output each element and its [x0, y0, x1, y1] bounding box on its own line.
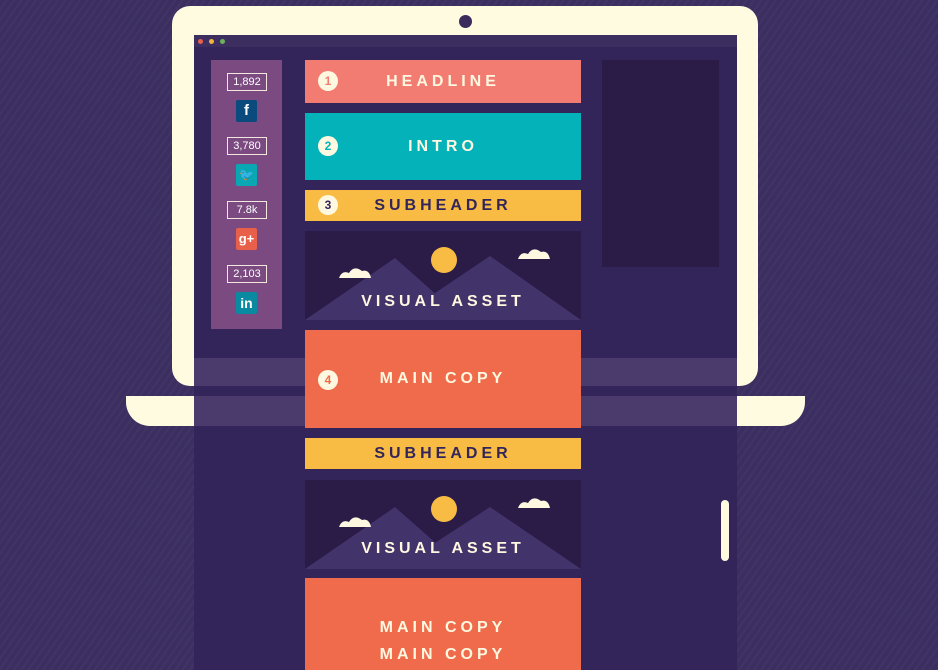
screen page — [194, 35, 737, 670]
subheader 2 — [305, 438, 581, 469]
browser bar — [194, 35, 737, 47]
headline — [305, 60, 581, 103]
overlay bands — [194, 358, 737, 386]
scrollbar — [721, 500, 729, 561]
visual asset 1: VISUAL ASSET — [361, 292, 525, 310]
main copy 1: 4 — [325, 373, 331, 387]
subheader 1: 3 — [325, 198, 331, 212]
main copy 1 — [305, 330, 581, 428]
sidebar: social shares: 🐦 — [239, 168, 254, 182]
sidebar: social shares: in — [240, 295, 253, 311]
sidebar: social shares: 7.8k — [237, 204, 257, 216]
intro: INTRO — [408, 138, 478, 154]
headline: 1 — [325, 74, 331, 88]
sidebar: social shares: g+ — [239, 231, 254, 246]
sidebar: social shares: 2,103 — [233, 268, 261, 280]
main copy 2 — [305, 578, 581, 670]
headline: HEADLINE — [386, 72, 500, 90]
visual asset 2 — [305, 480, 581, 569]
visual asset 1 — [305, 231, 581, 320]
sidebar: social shares: 1,892 — [233, 76, 261, 88]
sidebar: social shares: 3,780 — [233, 140, 261, 152]
subheader 2: SUBHEADER — [374, 444, 512, 462]
intro — [305, 113, 581, 180]
main copy 2: MAIN COPY — [380, 646, 506, 663]
right sidebar ad — [602, 60, 719, 267]
sidebar: social shares — [211, 60, 282, 329]
visual asset 2: VISUAL ASSET — [361, 540, 525, 556]
main copy 1: MAIN COPY — [380, 370, 506, 387]
intro: 2 — [325, 139, 331, 153]
camera — [459, 15, 472, 28]
subheader 1: SUBHEADER — [374, 196, 512, 214]
main copy 2: MAIN COPY — [380, 619, 506, 636]
sidebar: social shares: f — [244, 102, 249, 119]
laptop base — [126, 396, 805, 426]
laptop lid — [172, 6, 758, 386]
subheader 1 — [305, 190, 581, 221]
